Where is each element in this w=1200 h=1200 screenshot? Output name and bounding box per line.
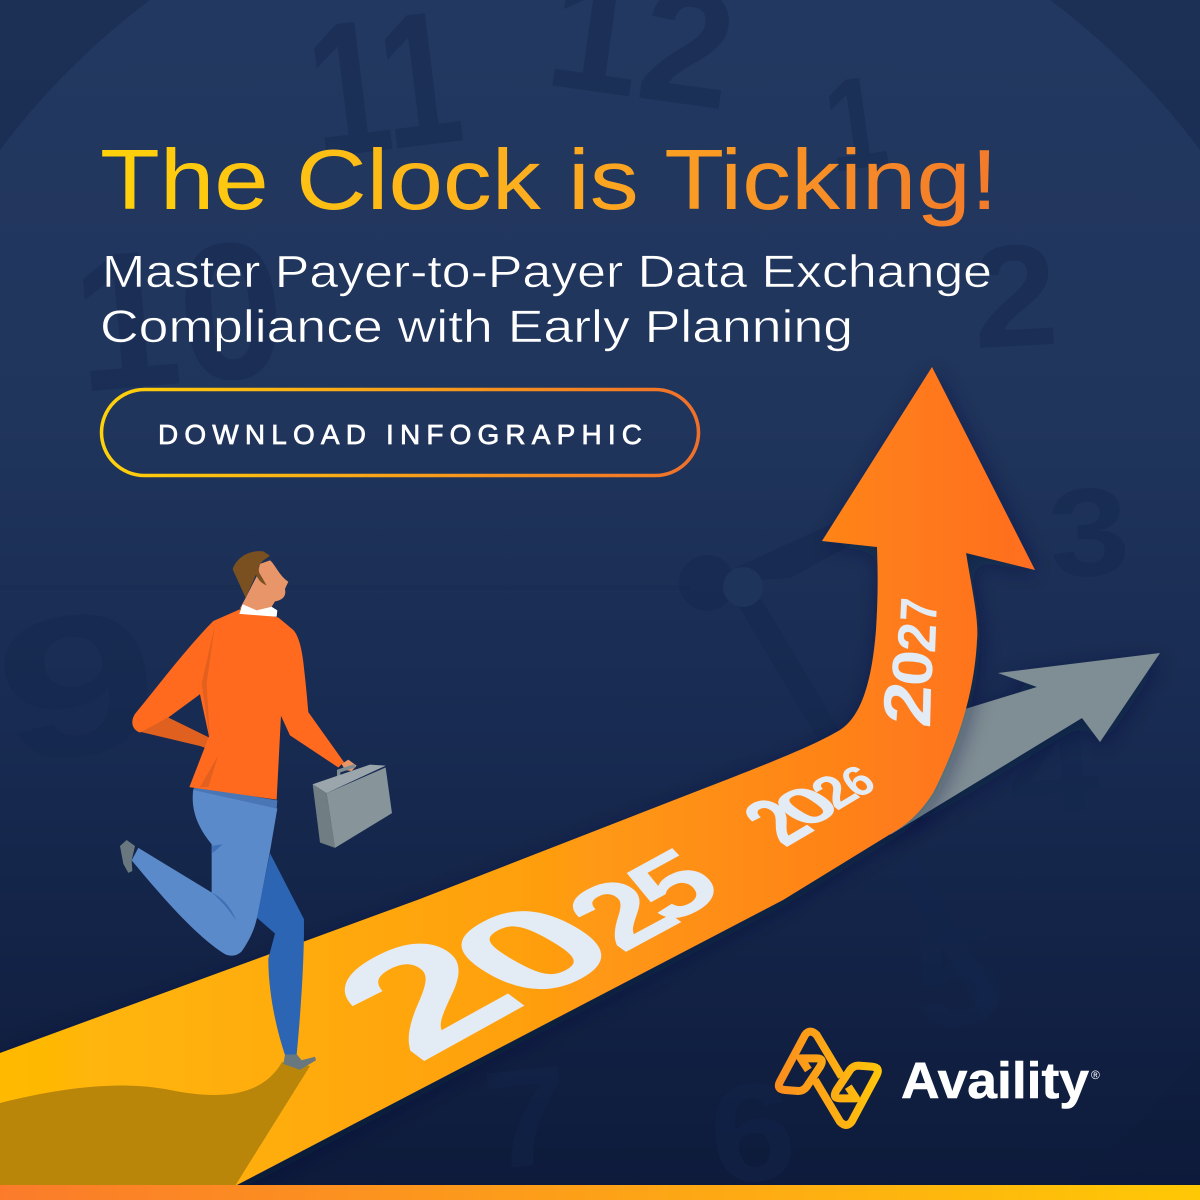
collar xyxy=(239,604,277,617)
clock numerals: 7 xyxy=(477,1035,578,1200)
hair xyxy=(233,551,270,598)
download button xyxy=(102,390,698,476)
front shoe xyxy=(283,1054,316,1070)
year 2026 xyxy=(722,755,885,859)
year 2027: 7 xyxy=(890,596,949,624)
trouser crease xyxy=(212,844,237,921)
hand xyxy=(342,760,357,771)
grey arrow xyxy=(890,653,1160,835)
year 2025 xyxy=(286,828,742,1088)
clock numerals: 10 xyxy=(65,198,293,434)
year 2027: 2 xyxy=(887,620,948,655)
title: The Clock is Ticking! xyxy=(100,133,998,228)
bottom stripe xyxy=(0,1185,1200,1200)
pants xyxy=(132,789,277,956)
subtitle xyxy=(100,246,992,352)
clock numerals: 2 xyxy=(968,213,1062,379)
back shoe xyxy=(120,840,135,873)
back forearm xyxy=(140,717,210,750)
Availity logo xyxy=(779,1032,1100,1125)
year 2026: 6 xyxy=(830,755,885,807)
year 2025: 2 xyxy=(286,903,564,1088)
logo mark xyxy=(779,1032,878,1125)
download button: DOWNLOAD INFOGRAPHIC xyxy=(158,419,642,450)
orange road arrow xyxy=(0,367,1035,1186)
waistband shadow xyxy=(193,786,277,809)
year 2025: 5 xyxy=(603,828,742,942)
year 2026: 2 xyxy=(722,784,833,859)
year 2027 xyxy=(870,596,949,731)
sweater xyxy=(132,609,344,800)
back leg xyxy=(257,853,304,1055)
neck and face xyxy=(240,560,288,616)
clock hands xyxy=(0,520,1000,1020)
logo wordmark: Availity xyxy=(901,1052,1090,1109)
year 2027: 2 xyxy=(870,677,946,731)
person running with briefcase xyxy=(120,551,392,1070)
subtitle: Master Payer-to-Payer Data Exchange xyxy=(102,246,992,297)
year 2026: 2 xyxy=(796,764,872,819)
year 2025: 2 xyxy=(537,859,707,969)
clock numerals: 1 xyxy=(816,47,895,200)
year 2026: 0 xyxy=(755,774,858,838)
briefcase xyxy=(313,765,392,848)
clock numerals: 5 xyxy=(905,894,1011,1060)
registered mark: ® xyxy=(1091,1068,1100,1082)
subtitle: Compliance with Early Planning xyxy=(100,301,853,352)
year 2025: 0 xyxy=(404,878,661,1022)
year 2027: 0 xyxy=(880,647,945,689)
clock numerals: 4 xyxy=(1002,690,1104,843)
clock numerals: 3 xyxy=(1044,461,1134,605)
sweater crease xyxy=(200,625,218,787)
road shadow xyxy=(0,1062,310,1186)
